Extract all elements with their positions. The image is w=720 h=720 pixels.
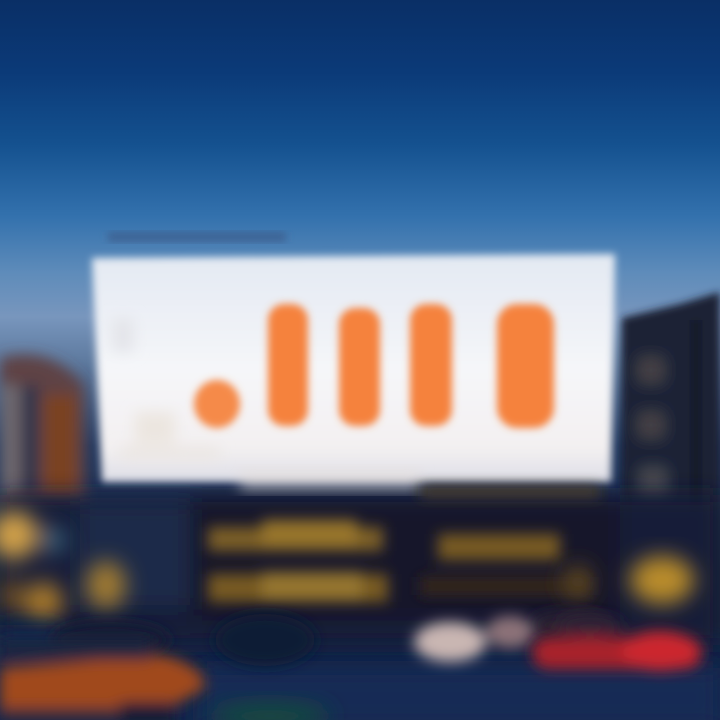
orange bar 3 [410,304,452,426]
road [0,625,720,720]
bar chart: orange bars [194,304,554,428]
orange dot bar [194,380,240,428]
billboard faint chart marks [112,318,220,459]
orange bar 1 [268,304,308,426]
billboard bottom glow [240,470,420,490]
right street light [564,556,694,604]
red car [532,615,702,671]
dark car silhouettes [50,611,610,666]
green car roof [210,702,330,720]
orange bar 4 [497,304,554,428]
white car [414,616,534,662]
right dark building [622,292,720,630]
orange bar 2 [339,308,380,426]
billboard top edge shadow [108,232,286,242]
lit building windows [208,487,600,602]
left street lights [0,511,126,622]
orange car [0,640,205,720]
left brown building [0,355,86,505]
lower street-level dark mass [0,495,720,645]
billboard panel [92,254,615,482]
